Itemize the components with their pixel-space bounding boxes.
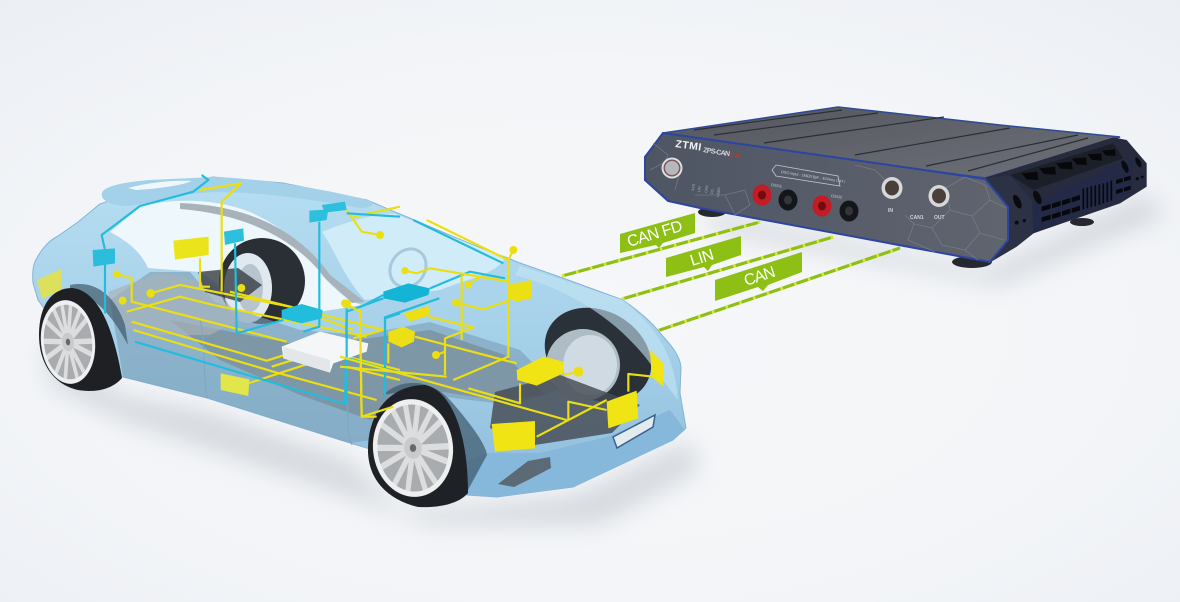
CAN OUT connector: CAN1 xyxy=(910,215,924,221)
front chassis xyxy=(490,375,640,445)
power button xyxy=(662,158,682,178)
door seam xyxy=(200,320,352,445)
rear light box xyxy=(37,269,61,299)
line: LIN xyxy=(622,237,833,299)
lower cabin xyxy=(110,272,560,443)
tag: CAN: CAN xyxy=(742,264,778,290)
spoiler xyxy=(102,177,373,208)
car ground shadow xyxy=(45,340,700,525)
engine bay xyxy=(108,272,240,335)
device ZPS-CAN xyxy=(645,107,1147,268)
screws xyxy=(1011,157,1144,225)
tag: CAN FD xyxy=(620,213,695,253)
tag: CAN FD: CAN FD xyxy=(625,218,685,251)
yellow wires rear xyxy=(117,183,400,417)
status indicators: CAN xyxy=(704,185,709,193)
side vents xyxy=(1042,176,1131,222)
model name xyxy=(703,147,740,160)
DSO2 connectors xyxy=(812,193,858,222)
front panel xyxy=(645,133,1008,262)
upper vents xyxy=(1022,149,1116,180)
status indicators: LIN xyxy=(697,186,702,192)
grille xyxy=(1083,181,1111,209)
front wheel arch xyxy=(383,383,487,490)
top plate grooves xyxy=(694,110,1088,171)
line: CAN xyxy=(657,248,900,331)
tag: LIN xyxy=(666,236,741,277)
rear wheel arch xyxy=(70,284,128,345)
DSO1 connectors: DSO1 xyxy=(771,182,783,189)
CAN IN connector xyxy=(882,177,902,214)
cyan wires rear xyxy=(102,175,400,404)
number plate xyxy=(613,415,655,448)
CAN OUT connector: OUT xyxy=(934,215,945,221)
DSO1 connectors xyxy=(752,182,798,210)
wiring front section xyxy=(340,220,663,452)
vent band xyxy=(1010,143,1123,190)
front wheel xyxy=(368,385,468,507)
corner block xyxy=(983,175,1033,262)
yellow wires front xyxy=(340,220,653,437)
white battery block xyxy=(282,332,368,373)
pillar xyxy=(180,203,365,303)
CAN IN connector: IN xyxy=(888,208,893,214)
yellow boxes front xyxy=(388,280,663,452)
far rear wheel xyxy=(219,238,305,324)
signal lines xyxy=(562,222,900,331)
hood panel xyxy=(515,266,678,400)
device ground shadow xyxy=(700,195,1165,285)
model name: ZPS-CAN xyxy=(703,147,730,158)
device right end xyxy=(983,137,1147,262)
status indicators: SYS xyxy=(691,183,696,191)
yellow dots front xyxy=(341,246,583,377)
side panel xyxy=(1033,160,1133,233)
side window xyxy=(110,201,362,315)
tag: CAN xyxy=(715,252,802,301)
DSO2 connectors: DSO2 xyxy=(831,193,843,200)
status indicators: USER xyxy=(716,186,721,197)
bumper intake xyxy=(498,457,551,487)
car body shell xyxy=(33,177,686,497)
CAN OUT connector xyxy=(910,185,950,221)
warning label: DSO input : 1MΩ/16pF , 40Vrms CAT I xyxy=(781,170,846,184)
car xyxy=(33,175,686,507)
cyan wires front xyxy=(347,220,505,403)
end casing xyxy=(983,137,1147,262)
bumper xyxy=(468,410,685,497)
yellow boxes rear xyxy=(173,237,249,396)
rear wheel xyxy=(37,288,122,391)
tag: LIN: LIN xyxy=(688,247,716,270)
warning label xyxy=(772,165,846,186)
hexagon pattern xyxy=(650,143,1006,260)
spoiler highlight xyxy=(128,181,192,190)
model name: 20 xyxy=(730,152,740,160)
yellow sensor dots rear xyxy=(113,231,384,308)
status indicators: FD xyxy=(710,188,715,194)
device feet xyxy=(698,207,1094,268)
windscreen xyxy=(322,214,505,300)
dark chassis xyxy=(198,268,262,302)
cyan boxes rear xyxy=(93,202,347,323)
interior floor xyxy=(170,320,545,420)
cyan control box xyxy=(383,283,430,303)
device top plate xyxy=(663,107,1120,178)
status indicators xyxy=(691,183,721,197)
line: CAN FD xyxy=(562,222,760,276)
wiring rear section xyxy=(93,175,400,417)
far front wheel xyxy=(528,289,668,421)
brand logo: ZTMI xyxy=(675,138,702,154)
steering wheel xyxy=(383,242,433,294)
